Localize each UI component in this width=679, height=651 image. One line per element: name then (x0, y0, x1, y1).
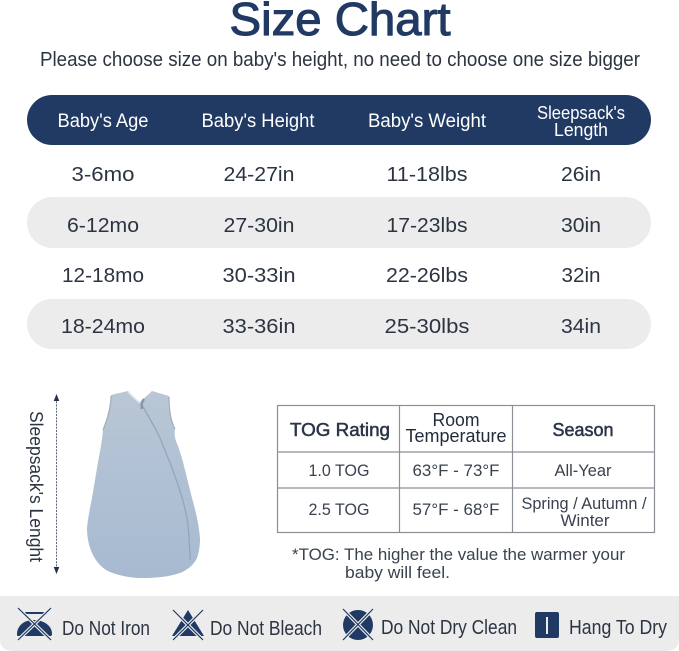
TOG row: 1.0: All-Year (554, 461, 612, 480)
row: 18-24mo: 25-30lbs (384, 316, 470, 338)
label: do not iron: Do Not Iron (62, 617, 150, 640)
TOG row: 2.5: Spring / Autumn / (522, 494, 647, 513)
TOG header row: Season (552, 420, 614, 440)
row: 6-12mo: 30in (561, 215, 601, 237)
row: 12-18mo: 32in (562, 265, 600, 287)
TOG footnote: baby will feel. (345, 563, 450, 582)
header bar: Baby's Age (58, 111, 148, 132)
label: do not bleach: Do Not Bleach (210, 617, 322, 640)
row: 18-24mo: 34in (561, 316, 601, 338)
TOG row: 1.0: 1.0 TOG (308, 461, 370, 480)
TOG header row: TOG Rating (290, 420, 390, 440)
row: 3-6mo (72, 164, 601, 186)
sleepsack illustration (87, 391, 200, 578)
TOG row: 1.0: 63°F - 73°F (412, 461, 500, 480)
header bar: Baby's Weight (368, 111, 487, 132)
row: 12-18mo: 22-26lbs (386, 265, 468, 287)
icon: do not bleach (172, 610, 204, 640)
row: 12-18mo: 12-18mo (62, 265, 144, 287)
TOG header row: Room (432, 410, 480, 430)
header bar: Baby's Height (202, 111, 315, 132)
TOG row: 2.5: Winter (560, 511, 610, 530)
TOG row: 1.0 (308, 461, 612, 480)
row: 3-6mo: 11-18lbs (386, 164, 468, 186)
sleepsack length arrow (54, 394, 59, 574)
row: 6-12mo: 17-23lbs (386, 215, 468, 237)
row: 6-12mo: 6-12mo (67, 215, 139, 237)
care instructions band (0, 596, 679, 651)
row: 18-24mo (27, 299, 651, 349)
TOG footnote (292, 545, 625, 582)
TOG row: 2.5: 57°F - 68°F (412, 500, 500, 519)
label: do not dry clean: Do Not Dry Clean (381, 616, 517, 639)
row: 18-24mo: 33-36in (222, 316, 296, 338)
zipper seam (142, 405, 190, 560)
row: 12-18mo: 30-33in (222, 265, 296, 287)
size table (27, 95, 651, 349)
icon: do not iron (17, 608, 52, 640)
icon: hang to dry (535, 612, 559, 638)
TOG footnote: *TOG: The higher the value the warmer your (292, 545, 625, 564)
TOG header row: Temperature (406, 426, 506, 446)
row: 12-18mo (62, 265, 600, 287)
TOG row: 2.5: 2.5 TOG (308, 500, 370, 519)
TOG header row (290, 410, 614, 446)
header bar: Sleepsack's (537, 103, 625, 123)
TOG row: 2.5 (308, 494, 647, 530)
TOG table (277, 405, 654, 532)
header bar (27, 95, 651, 145)
header bar: Length (554, 120, 608, 140)
icon: do not dry clean (343, 609, 373, 640)
row: 3-6mo: 24-27in (224, 164, 294, 186)
sleepsack length label: Sleepsack's Lenght (26, 411, 46, 562)
row: 6-12mo (27, 197, 651, 248)
row: 18-24mo: 18-24mo (61, 316, 145, 338)
row: 3-6mo: 3-6mo (72, 164, 134, 186)
row: 6-12mo: 27-30in (224, 215, 294, 237)
subtitle: Please choose size on baby's height, no need to choose one size bigger (40, 49, 640, 71)
row: 3-6mo: 26in (561, 164, 601, 186)
